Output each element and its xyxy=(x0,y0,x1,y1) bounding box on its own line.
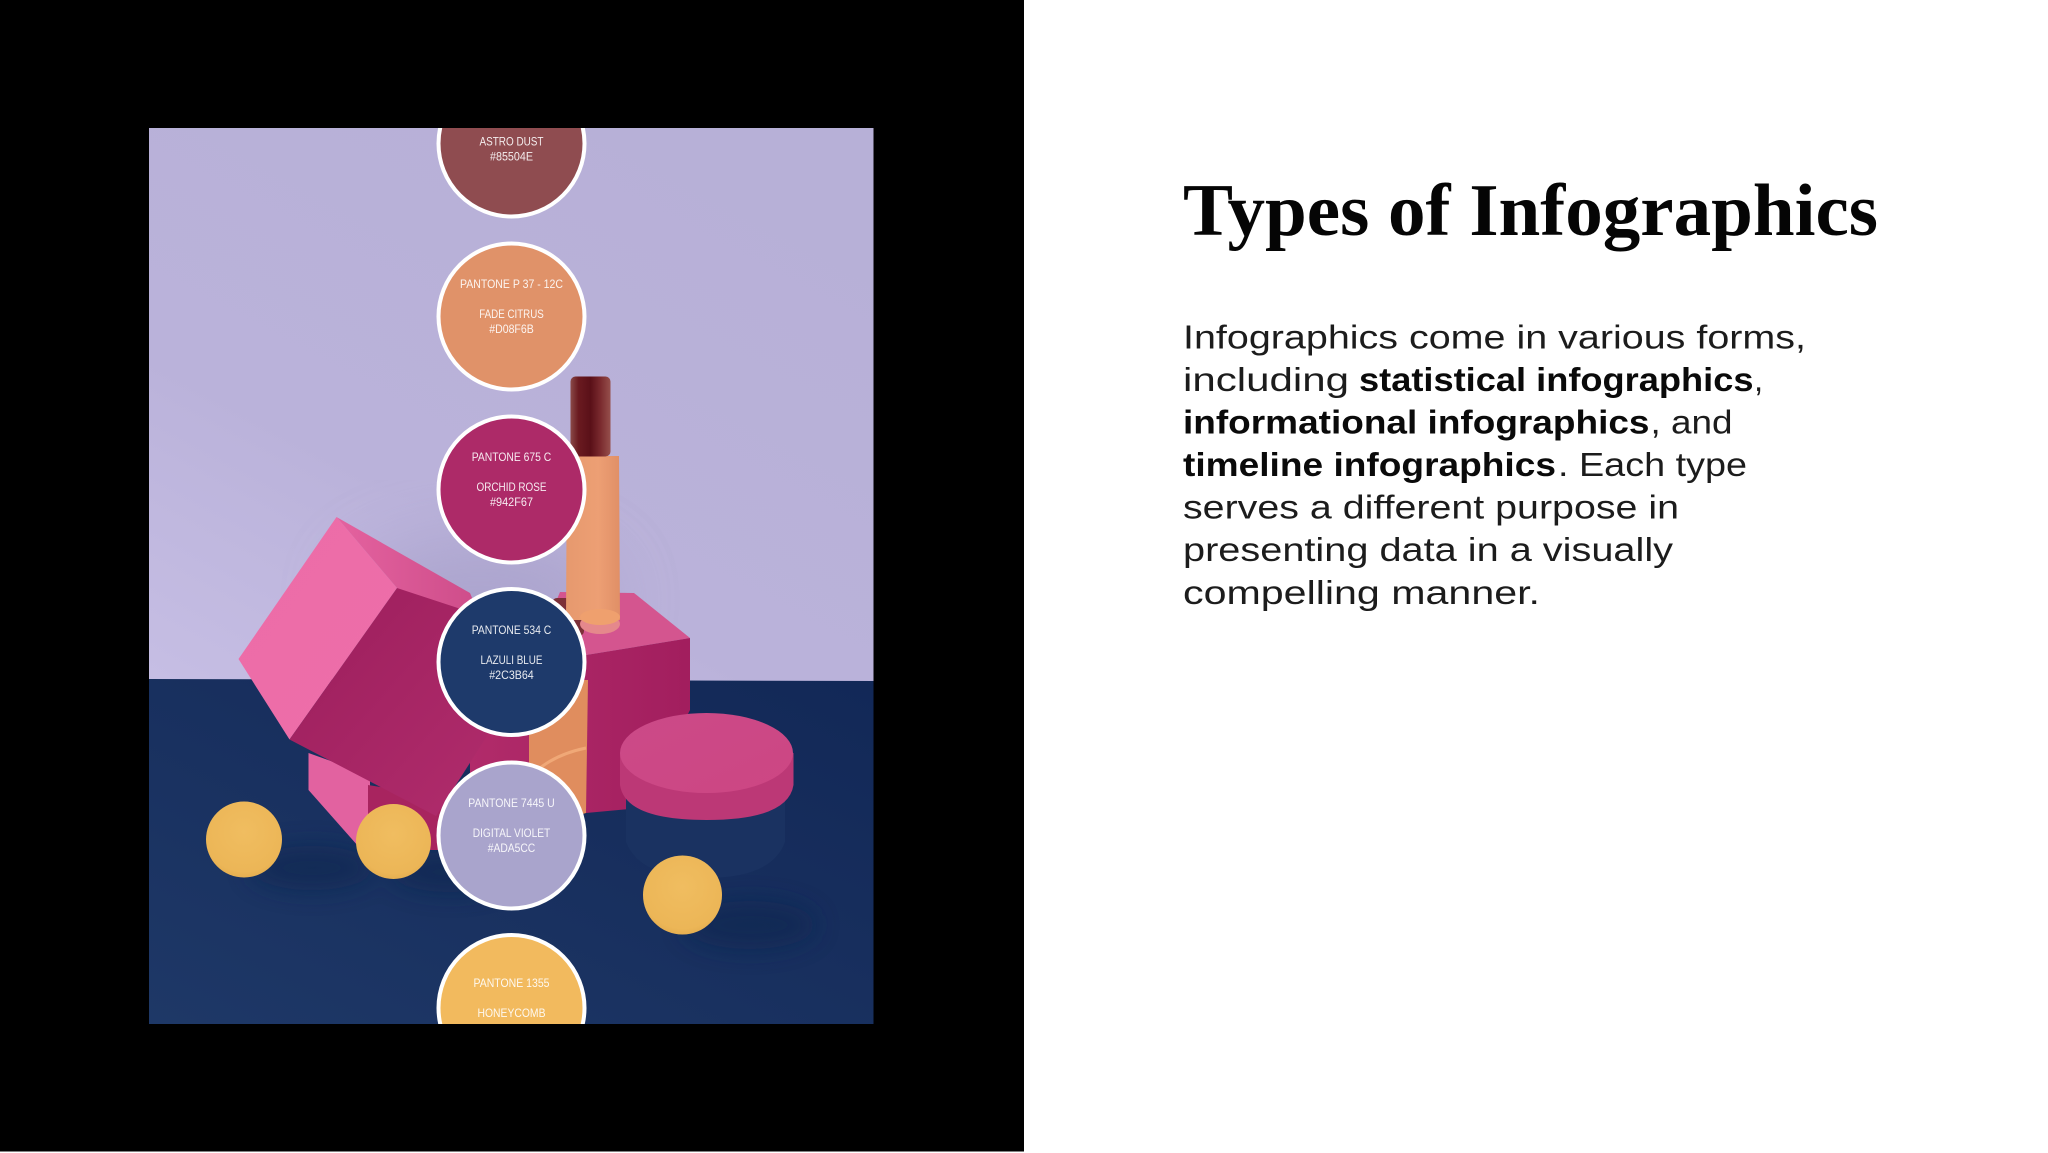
lavender wall xyxy=(149,128,874,681)
body paragraph: informational infographics xyxy=(1183,404,1650,440)
tall perfume bottle xyxy=(566,376,620,634)
yellow balls xyxy=(206,802,722,934)
swatch: Lazuli Blue: PANTONE 534 C xyxy=(472,623,552,637)
swatch: Fade Citrus: FADE CITRUS xyxy=(479,307,544,321)
swatch: Digital Violet xyxy=(438,762,584,908)
floor shadows xyxy=(266,852,794,938)
swatch: Digital Violet: PANTONE 7445 U xyxy=(468,796,555,810)
tilted pink cube xyxy=(238,517,490,816)
body paragraph: including xyxy=(1183,361,1349,398)
swatch: Fade Citrus: PANTONE P 37 - 12C xyxy=(460,277,563,291)
body paragraph: compelling manner. xyxy=(1183,574,1540,611)
body paragraph: presenting data in a visually xyxy=(1183,531,1674,568)
swatch: Lazuli Blue xyxy=(438,589,584,735)
small dark bottle cap xyxy=(552,598,584,636)
body paragraph: timeline infographics xyxy=(1183,446,1556,483)
navy floor xyxy=(149,679,874,1024)
body paragraph: , xyxy=(1754,361,1763,398)
swatch: Orchid Rose: ORCHID ROSE xyxy=(476,480,546,494)
swatch: Astro Dust: #85504E xyxy=(490,150,533,164)
swatch: Lazuli Blue: LAZULI BLUE xyxy=(480,653,542,667)
swatch: Fade Citrus: #D08F6B xyxy=(489,322,534,336)
swatch: Honeycomb xyxy=(436,933,586,1024)
black left panel xyxy=(0,0,1024,1152)
swatch: Orchid Rose: #942F67 xyxy=(490,495,533,509)
photo: product still life with colour swatches xyxy=(149,128,874,1024)
body paragraph: statistical infographics xyxy=(1359,361,1754,398)
swatch: Astro Dust xyxy=(436,128,586,218)
body paragraph xyxy=(1183,318,1806,611)
swatch: Astro Dust: ASTRO DUST xyxy=(480,134,544,148)
swatch: Honeycomb: PANTONE 1355 xyxy=(474,976,550,990)
body paragraph: . Each type xyxy=(1558,446,1747,483)
body paragraph: , and xyxy=(1650,404,1732,440)
wall shadow xyxy=(404,542,566,600)
swatch: Orchid Rose xyxy=(438,416,584,562)
magenta box xyxy=(470,592,690,830)
swatch: Digital Violet: DIGITAL VIOLET xyxy=(473,826,551,840)
body paragraph: Infographics come in various forms, xyxy=(1183,318,1806,356)
swatch: Honeycomb: HONEYCOMB xyxy=(478,1006,546,1020)
swatch: Lazuli Blue: #2C3B64 xyxy=(489,668,534,682)
orange bottle, lower xyxy=(529,680,588,814)
cylindrical jar xyxy=(620,713,794,820)
body paragraph: serves a different purpose in xyxy=(1183,488,1679,526)
swatch: Digital Violet: #ADA5CC xyxy=(488,841,536,855)
lower pink cube xyxy=(308,753,445,850)
title: Types of Infographics xyxy=(1183,170,1878,252)
swatch: Orchid Rose: PANTONE 675 C xyxy=(472,450,552,464)
swatch: Fade Citrus xyxy=(438,244,584,390)
